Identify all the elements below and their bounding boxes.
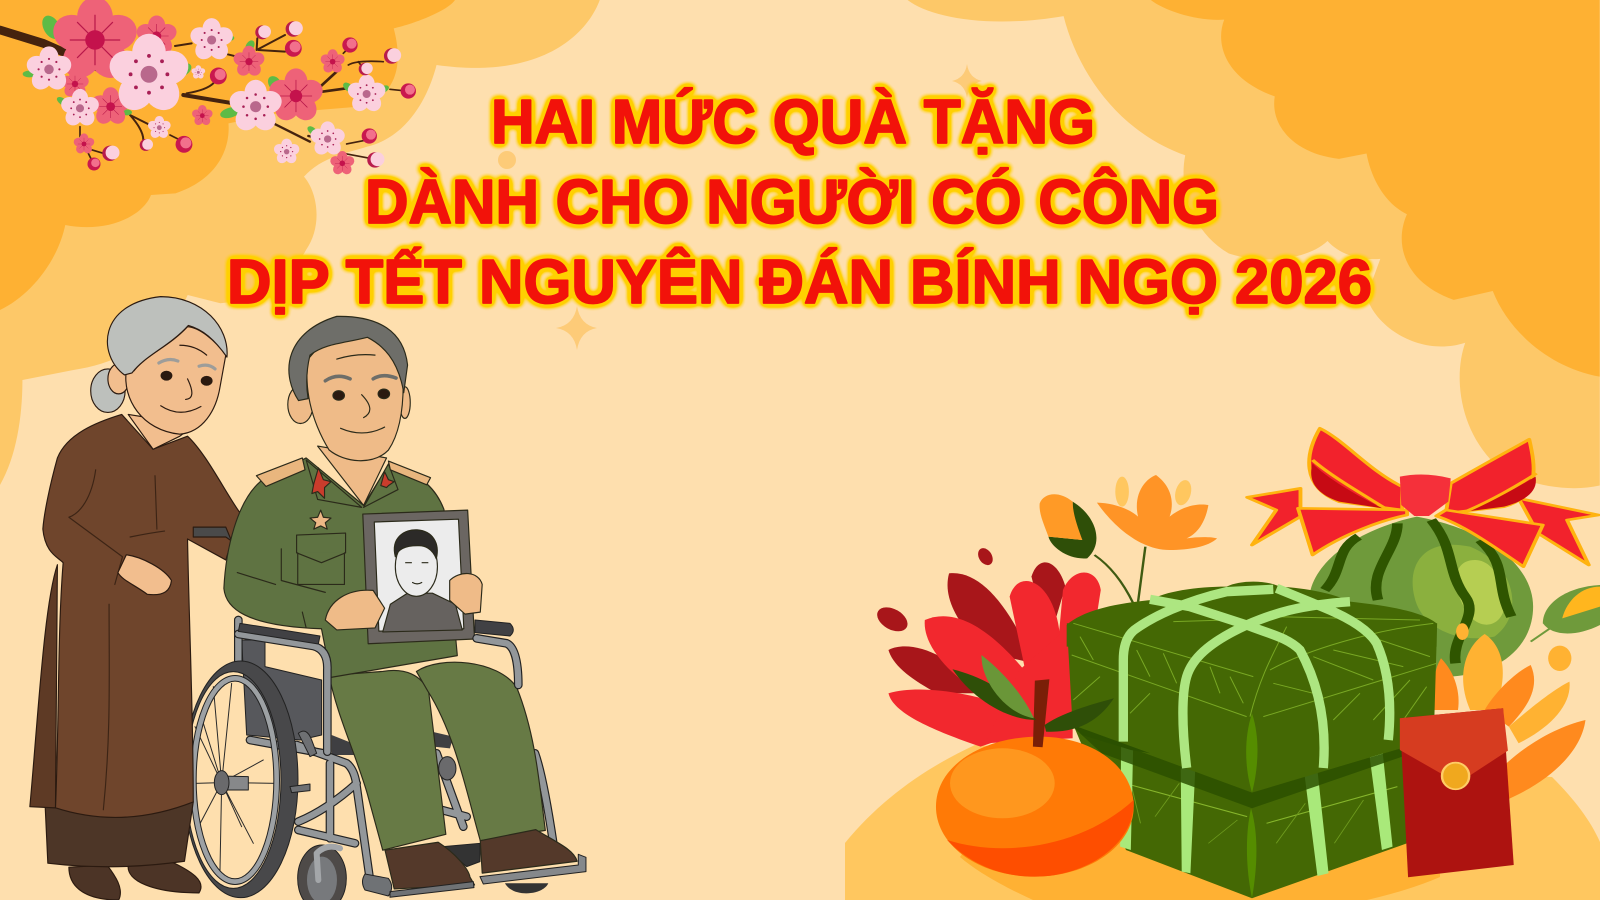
sparkle star: [952, 64, 982, 98]
title line 3: DỊP TẾT NGUYÊN ĐÁN BÍNH NGỌ 2026: [227, 248, 1372, 317]
wheelchair backrest: [242, 640, 322, 740]
woman eyes and mouth: [161, 371, 212, 385]
tangerine leaves: [952, 655, 1114, 732]
wheelchair push handle: [193, 527, 232, 541]
gift foreground: [936, 655, 1514, 877]
string 3: [1277, 588, 1390, 740]
woman arm crease: [69, 470, 165, 810]
wheelchair rim highlight: [193, 678, 277, 882]
wheelchair brake lever: [290, 731, 317, 793]
right footrest: [480, 854, 586, 884]
rank stars: [312, 468, 394, 498]
string 2: [1183, 602, 1350, 768]
chest pocket: [297, 533, 346, 584]
photo portrait features: [406, 563, 428, 584]
wheelchair frame tubes: [238, 620, 553, 880]
woman face: [126, 327, 226, 434]
woman neck: [128, 414, 188, 449]
photo paper: [374, 519, 464, 631]
bamboo strings: [1123, 588, 1390, 768]
veteran head: [307, 335, 403, 461]
rear hub behind legs: [439, 757, 456, 780]
woman hand: [118, 555, 171, 595]
wheelchair spokes: [195, 683, 277, 870]
red envelope: [1400, 708, 1514, 877]
veteran shoes: [385, 842, 475, 889]
medal star: [310, 510, 331, 529]
flower buds: [87, 21, 416, 170]
string 4: [1150, 599, 1324, 768]
title line 1: HAI MỨC QUÀ TẶNG: [491, 88, 1095, 157]
leaf veins: [1072, 617, 1437, 720]
lower banh chung: [1073, 723, 1434, 898]
veteran collar tabs: [306, 460, 398, 507]
green bud right: [1456, 585, 1600, 671]
veteran jacket: [224, 458, 457, 677]
woman dress: [43, 414, 240, 817]
ground: darker shadow: [960, 800, 1440, 900]
background cloud: top-left dark: [0, 0, 455, 310]
woman hair bun: [91, 369, 125, 412]
veteran hair: [289, 316, 408, 401]
green leaves: [23, 12, 390, 137]
veteran neck: [318, 446, 387, 505]
sparkle dot: [498, 151, 516, 169]
wheelchair hub axle: [220, 776, 248, 790]
upper banh chung top and strings: [1067, 582, 1437, 768]
background cloud: top-left light: [0, 0, 600, 485]
veteran ears: [288, 386, 313, 424]
wheelchair front wheel under footrest: [505, 883, 548, 893]
wheelchair seat: [332, 732, 453, 755]
title line 2: DÀNH CHO NGƯỜI CÓ CÔNG: [365, 168, 1219, 237]
veteran right hand: [450, 574, 482, 614]
photo frame: [363, 510, 475, 644]
red bow: [1247, 428, 1599, 567]
watermelon: [1309, 517, 1533, 677]
branch twigs: [0, 30, 403, 163]
orange lily and bud: [1040, 475, 1217, 603]
wheelchair hub: [214, 771, 229, 795]
string 1: [1123, 589, 1273, 742]
veteran legs: [329, 670, 446, 850]
left footrest: [362, 874, 474, 897]
veteran sleeve crease: [237, 549, 325, 628]
wheelchair rim: [193, 678, 277, 882]
photo portrait shirt: [383, 593, 462, 632]
photo portrait face: [395, 537, 437, 596]
veteran brows eyes mouth: [333, 389, 390, 400]
pink blossoms: [48, 0, 356, 176]
dark shoe behind footrest: [443, 843, 480, 867]
wheelchair tyre: [183, 661, 298, 898]
banh chung top face: [1067, 582, 1437, 647]
background cloud: top-right light: [908, 0, 1600, 488]
veteran left hand: [325, 590, 385, 630]
woman hair: [107, 297, 227, 375]
wheelchair arms and footrests in front of veteran: [238, 620, 586, 897]
sparkle star: [556, 306, 597, 350]
wheelchair caster: [298, 845, 346, 900]
woman back panel of dress: [30, 565, 57, 808]
tangerine shadow band on cake: [1073, 725, 1150, 753]
upper banh chung body: [1067, 623, 1437, 793]
wheelchair frame outline: [238, 620, 553, 880]
pale blossoms: [24, 18, 388, 165]
orange flower behind red envelope: [1433, 634, 1585, 800]
wheelchair: [183, 620, 553, 900]
illustration: elderly woman: [30, 297, 240, 900]
armrest tube: [238, 634, 518, 752]
red flower: [871, 547, 1101, 747]
woman shoes: [69, 861, 201, 900]
woman ear: [108, 364, 129, 394]
woman trousers: [45, 802, 193, 867]
background cloud: top-right dark: [1151, 0, 1600, 377]
illustration: veteran: [224, 316, 577, 889]
veteran epaulettes: [256, 458, 431, 486]
blossom branch: [0, 0, 416, 176]
ground: light hill: [845, 745, 1600, 900]
tangerine: [936, 679, 1134, 877]
title: [227, 88, 1372, 317]
armrest pads: [238, 620, 513, 644]
armrest tube outline: [238, 634, 518, 752]
illustration: Tet gifts: [871, 428, 1600, 898]
photo portrait hair: [394, 530, 437, 559]
